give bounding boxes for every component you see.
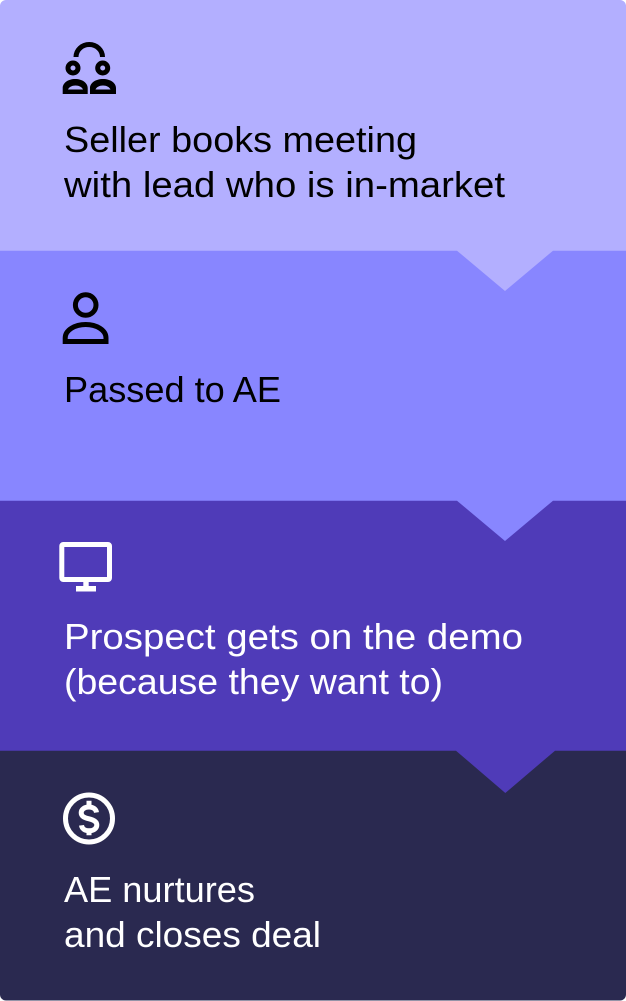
icon: monitor	[62, 544, 110, 592]
text: seller books meeting: Seller books meeting	[64, 119, 417, 160]
panel: step 4 closes deal	[0, 750, 626, 1000]
text: prospect gets on the demo: Prospect gets on the demo	[64, 616, 523, 657]
panel: step 2 passed to AE	[0, 250, 626, 541]
text: AE nurtures and closes deal: and closes deal	[64, 914, 321, 955]
icon: dollar coin	[66, 795, 112, 842]
icon: two people with headset arc	[63, 44, 116, 94]
text: prospect gets on the demo: (because they want to)	[64, 661, 443, 702]
icon: person	[65, 295, 106, 342]
text: passed to AE: Passed to AE	[64, 369, 281, 410]
text: AE nurtures and closes deal: AE nurtures	[64, 869, 255, 910]
panel: step 3 demo	[0, 500, 626, 793]
text: seller books meeting: with lead who is in-market	[63, 164, 505, 205]
panel: step 1 seller books meeting	[0, 0, 626, 291]
